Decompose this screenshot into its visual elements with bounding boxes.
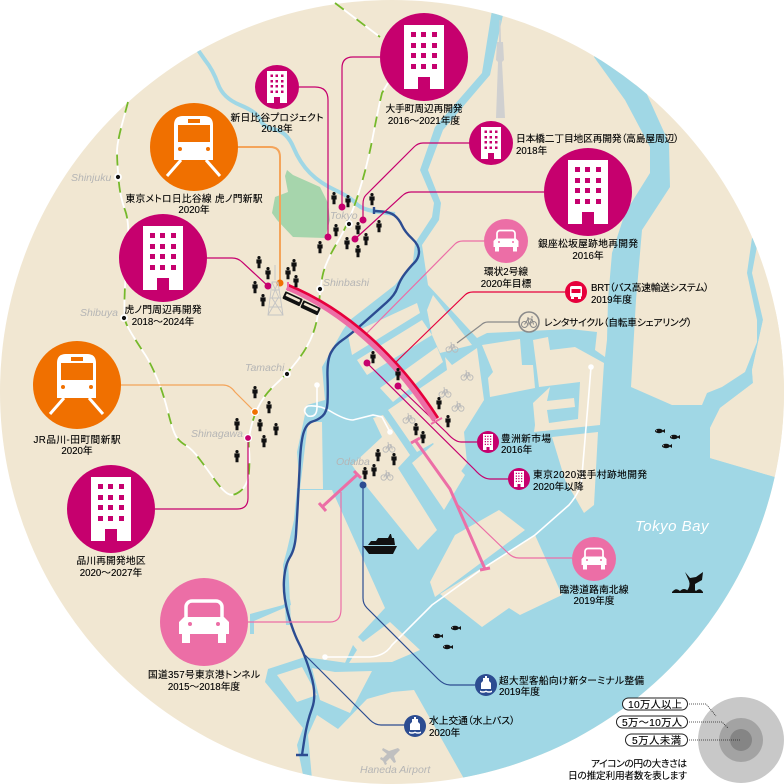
project: 東京メトロ日比谷線 虎ノ門新駅: 東京メトロ日比谷線 虎ノ門新駅 xyxy=(126,192,263,205)
legend circles xyxy=(698,697,784,783)
icon: cruise ship xyxy=(363,534,397,554)
icon: building small xyxy=(255,65,299,109)
legend: circle size: 10万人以上 xyxy=(628,699,682,711)
project: rent-a-cycle: レンタサイクル（自転車シェアリング） xyxy=(544,316,692,329)
icon: car small xyxy=(484,219,528,263)
project: rent-a-cycle xyxy=(519,312,692,332)
project: 環状2号線: 2020年目標 xyxy=(481,277,532,290)
icon: building xyxy=(67,465,155,553)
legend: circle size xyxy=(568,697,784,783)
white transit lines: Yurikamome and Rinkai xyxy=(304,365,593,659)
icon: BRT buses xyxy=(282,291,321,315)
icon: building tiny xyxy=(508,468,530,490)
project: 臨港道路南北線: 臨港道路南北線 xyxy=(560,583,629,596)
project: 銀座松坂屋跡地再開発: 銀座松坂屋跡地再開発 xyxy=(538,237,638,250)
project: 国道357号東京港トンネル xyxy=(148,578,260,693)
project: 銀座松坂屋跡地再開発 xyxy=(538,148,638,262)
project: 新日比谷プロジェクト xyxy=(230,65,324,135)
icon: car small xyxy=(572,537,616,581)
project: 銀座松坂屋跡地再開発: 2016年 xyxy=(572,249,604,262)
project: 国道357号東京港トンネル: 国道357号東京港トンネル xyxy=(148,668,260,681)
project: BRT: BRT（バス高速輸送システム） xyxy=(591,281,709,294)
icon: airplane xyxy=(380,748,400,765)
place names: Shinbashi xyxy=(323,277,370,289)
project: 東京2020選手村跡地開発 xyxy=(508,468,647,493)
project: 豊洲新市場: 2016年 xyxy=(501,443,533,456)
icon: Tokyo Skytree xyxy=(496,20,505,118)
project: 環状2号線: 環状2号線 xyxy=(484,265,528,278)
legend leader lines xyxy=(687,704,741,740)
bicycle icons xyxy=(381,342,473,480)
project: 超大型客船向け新ターミナル整備: 超大型客船向け新ターミナル整備 xyxy=(499,674,644,687)
project: 日本橋二丁目地区再開発 xyxy=(469,121,679,165)
project: 新日比谷プロジェクト: 2018年 xyxy=(261,122,293,135)
project: 品川再開発地区: 品川再開発地区 xyxy=(76,554,146,567)
BRT route arc xyxy=(287,282,442,424)
icon: building xyxy=(380,13,468,101)
water bus route xyxy=(284,207,419,755)
place names: Tokyo xyxy=(330,210,358,222)
water: rivers and Tokyo Bay xyxy=(198,10,784,784)
project: 水上交通: 水上交通（水上バス） xyxy=(429,715,515,727)
project: 日本橋二丁目地区再開発: 日本橋二丁目地区再開発（高島屋周辺） xyxy=(516,132,679,145)
project: 品川再開発地区: 2020～2027年 xyxy=(80,566,143,579)
place names: Haneda Airport xyxy=(360,764,431,776)
legend: circle size: 5万人未満 xyxy=(632,735,681,747)
project: 臨港道路南北線 xyxy=(560,537,629,607)
icon: building tiny xyxy=(477,431,499,453)
land: reclaimed islands xyxy=(277,290,784,713)
icon: ship xyxy=(475,674,497,696)
project: 環状2号線 xyxy=(481,219,532,290)
tunnel: Rinko road xyxy=(411,438,490,570)
project: 品川再開発地区 xyxy=(67,465,155,579)
destination dots xyxy=(244,204,402,488)
icon: car xyxy=(160,578,248,666)
project: 超大型客船向け新ターミナル整備: 2019年度 xyxy=(499,685,540,698)
icon: train xyxy=(150,103,238,191)
place names: Shinagawa xyxy=(191,428,243,440)
icon: building small xyxy=(469,121,513,165)
legend: circle size: 5万～10万人 xyxy=(622,717,683,729)
legend: circle size: アイコンの円の大きさは xyxy=(591,757,687,770)
project: 新日比谷プロジェクト: 新日比谷プロジェクト xyxy=(230,112,324,124)
project: 水上交通 xyxy=(404,715,515,739)
project: JR品川-田町間新駅: JR品川-田町間新駅 xyxy=(34,434,121,446)
place names: Odaiba xyxy=(336,456,370,468)
project: 国道357号東京港トンネル: 2015～2018年度 xyxy=(168,680,240,693)
people icons xyxy=(234,192,451,479)
project: 大手町周辺再開発: 大手町周辺再開発 xyxy=(386,102,463,115)
place names: Tokyo Bay xyxy=(635,518,710,535)
icon: bus xyxy=(565,281,587,303)
project: 豊洲新市場: 豊洲新市場 xyxy=(501,432,551,445)
project: JR品川-田町間新駅: 2020年 xyxy=(61,444,93,457)
project: 日本橋二丁目地区再開発: 2018年 xyxy=(516,144,548,157)
project: 豊洲新市場 xyxy=(477,431,551,456)
project: BRT xyxy=(565,281,709,306)
icon: ship xyxy=(404,715,426,737)
tunnel: Route 357 xyxy=(319,471,361,511)
project: BRT: 2019年度 xyxy=(591,293,632,306)
project: 東京メトロ日比谷線 虎ノ門新駅: 2020年 xyxy=(178,203,210,216)
project: 大手町周辺再開発 xyxy=(380,13,468,127)
icon: building xyxy=(119,214,207,302)
project: 東京2020選手村跡地開発: 東京2020選手村跡地開発 xyxy=(533,468,647,481)
project: 東京メトロ日比谷線 虎ノ門新駅 xyxy=(126,103,263,216)
place names: Shibuya xyxy=(80,307,118,319)
rail: Yamanote line xyxy=(117,3,388,495)
icon: building xyxy=(544,148,632,236)
place names: Tamachi xyxy=(245,362,285,374)
project: 虎ノ門周辺再開発: 2018～2024年 xyxy=(132,315,195,328)
project: 虎ノ門周辺再開発: 虎ノ門周辺再開発 xyxy=(124,303,202,316)
legend pills xyxy=(616,698,688,746)
icon: whale tail xyxy=(672,572,703,593)
icon: train xyxy=(33,341,121,429)
project: 臨港道路南北線: 2019年度 xyxy=(574,594,615,607)
icon: Tokyo Tower xyxy=(268,265,283,315)
project: JR品川-田町間新駅 xyxy=(33,341,121,457)
icon: fish xyxy=(433,429,680,649)
legend: circle size: 日の推定利用者数を表します xyxy=(568,769,687,782)
project: 東京2020選手村跡地開発: 2020年以降 xyxy=(533,480,584,493)
project: 虎ノ門周辺再開発 xyxy=(119,214,207,328)
station markers xyxy=(115,174,352,377)
icon: bicycle ring xyxy=(519,312,539,332)
park: Imperial Palace xyxy=(272,170,330,238)
project: 大手町周辺再開発: 2016～2021年度 xyxy=(388,114,460,127)
project: 超大型客船向け新ターミナル整備 xyxy=(475,674,644,698)
leader lines to project icons xyxy=(121,57,572,725)
place names: Shinjuku xyxy=(71,172,111,184)
place names xyxy=(71,172,710,776)
project: 水上交通: 2020年 xyxy=(429,726,461,739)
